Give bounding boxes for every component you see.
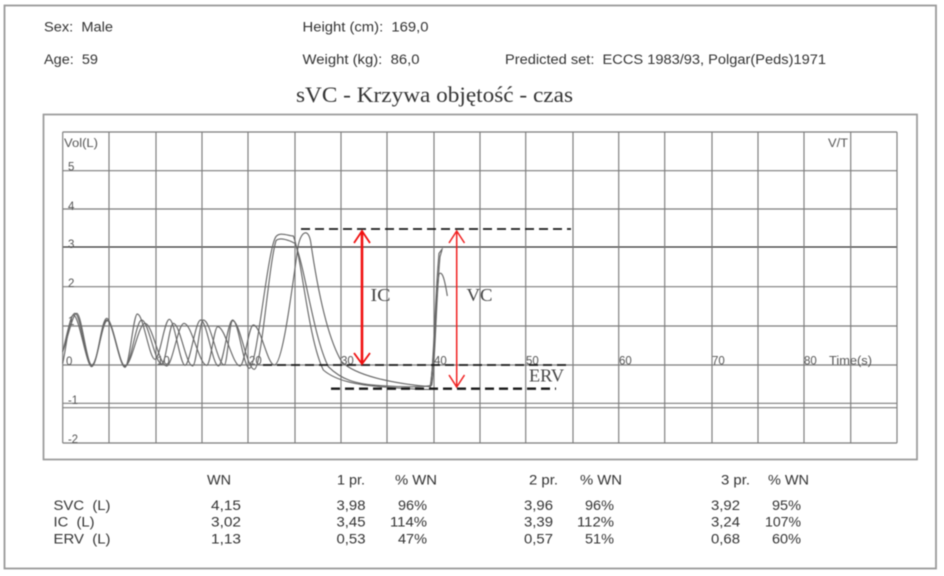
results table: ERV (L) — [54, 532, 110, 546]
axis labels: 50 — [526, 356, 539, 368]
results table: 3,96 — [524, 498, 553, 513]
axis labels: 1 — [68, 316, 74, 328]
arrow: IC — [354, 231, 370, 364]
axis labels: 2 — [68, 278, 74, 290]
axis labels: Time(s) — [829, 356, 872, 368]
results table: SVC (L) — [54, 498, 110, 513]
results table: 3,24 — [711, 514, 741, 530]
patient details header: Weight (kg): 86,0 — [302, 52, 420, 67]
axis labels: 0 — [66, 356, 72, 368]
results table: 0,57 — [524, 532, 553, 546]
results table: 1,13 — [211, 532, 241, 546]
results table: 2 pr. — [529, 472, 558, 488]
label: VC: VC — [466, 285, 492, 305]
axis labels: 40 — [434, 356, 447, 368]
results table: IC (L) — [54, 514, 94, 530]
axis labels: 70 — [712, 356, 725, 368]
results table: 0,68 — [711, 532, 740, 546]
results table: 95% — [772, 498, 801, 513]
results table: % WN — [580, 472, 622, 488]
chart panel frame — [44, 114, 917, 460]
results table: 107% — [765, 514, 801, 530]
results table: 3,45 — [336, 514, 366, 530]
axis labels: -1 — [68, 395, 78, 407]
patient details header: Height (cm): 169,0 — [302, 20, 428, 34]
axis labels: 3 — [68, 239, 74, 251]
patient details header: Age: 59 — [44, 52, 98, 67]
chart grid — [63, 132, 897, 443]
axis labels: 60 — [619, 356, 632, 368]
arrow: VC — [449, 231, 464, 387]
reference dashed lines — [263, 229, 571, 389]
patient details header: Predicted set: ECCS 1983/93, Polgar(Peds)1971 — [505, 52, 826, 67]
axis labels: 4 — [68, 201, 75, 213]
results table: 112% — [577, 514, 614, 530]
axis labels: 10 — [157, 356, 170, 368]
axis labels: 30 — [341, 356, 354, 368]
results table: 3,98 — [336, 498, 366, 513]
label: ERV: ERV — [529, 366, 564, 386]
results table: 96% — [398, 498, 427, 513]
label: IC: IC — [370, 285, 390, 305]
axis labels: 20 — [249, 356, 262, 368]
results table: WN — [207, 472, 231, 488]
results table: % WN — [768, 472, 809, 488]
results table: 96% — [585, 498, 614, 513]
results table: 47% — [398, 532, 427, 546]
results table: 114% — [390, 514, 427, 530]
volume-time curves — [63, 233, 447, 390]
results table: 3,92 — [711, 498, 740, 513]
results table: 3,39 — [524, 514, 553, 530]
patient details header — [44, 20, 826, 67]
results table: % WN — [395, 472, 437, 488]
axis labels: V/T — [828, 138, 848, 150]
results table: 3 pr. — [721, 472, 750, 488]
results table — [54, 472, 809, 546]
results table: 4,15 — [211, 498, 241, 513]
results table: 3,02 — [211, 514, 241, 530]
axis labels: 80 — [804, 356, 817, 368]
results table: 51% — [585, 532, 614, 546]
axis labels: -2 — [68, 434, 78, 446]
results table: 1 pr. — [337, 472, 365, 488]
axis labels: 5 — [68, 162, 74, 174]
chart title: sVC - Krzywa objętość - czas — [296, 82, 573, 107]
results table: 60% — [772, 532, 801, 546]
axis labels — [64, 138, 872, 446]
patient details header: Sex: Male — [44, 20, 113, 34]
results table: 0,53 — [336, 532, 366, 546]
axis labels: Vol(L) — [64, 138, 98, 150]
